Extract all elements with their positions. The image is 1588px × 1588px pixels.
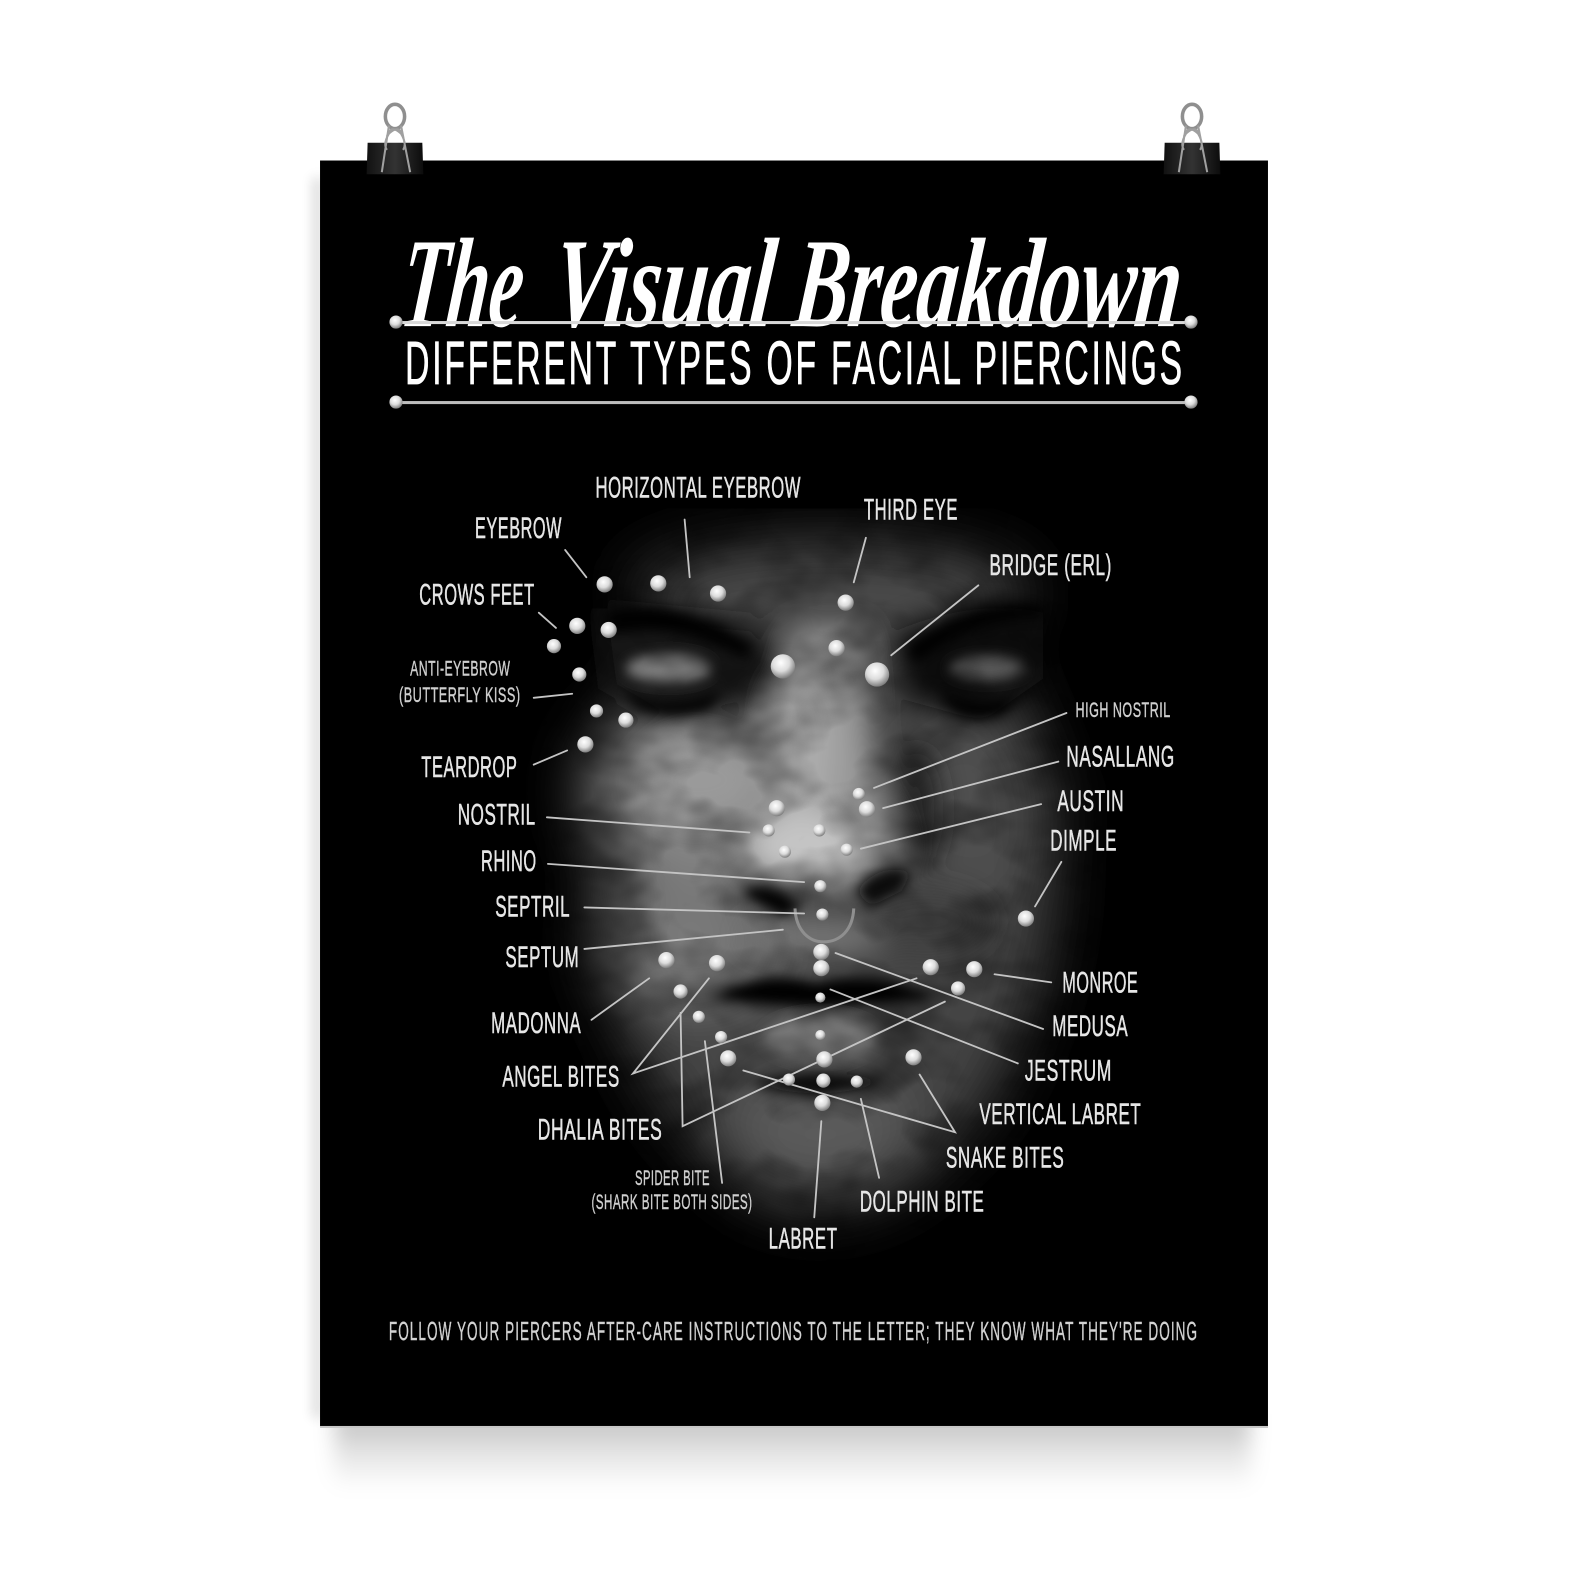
label: bridge (erl) xyxy=(891,549,1112,655)
label: rhino: RHINO xyxy=(481,845,537,878)
label: snake bites: SNAKE BITES xyxy=(946,1142,1064,1175)
title: The Visual Breakdown xyxy=(395,212,1190,354)
label: septril: SEPTRIL xyxy=(495,891,570,924)
label: angel bites: ANGEL BITES xyxy=(502,1061,620,1094)
title rule with end beads xyxy=(389,315,1198,329)
label: dolphin bite xyxy=(860,1099,984,1218)
septum ring xyxy=(795,908,854,942)
label: austin xyxy=(861,785,1124,849)
piercing beads xyxy=(547,575,1034,1111)
label: bridge (erl): BRIDGE (ERL) xyxy=(989,549,1112,582)
title: The Visual Breakdown: The xyxy=(395,212,531,354)
label: dolphin bite: DOLPHIN BITE xyxy=(860,1185,984,1218)
label: high nostril xyxy=(874,698,1171,788)
label: horizontal eyebrow: HORIZONTAL EYEBROW xyxy=(596,471,801,504)
label: nostril xyxy=(458,798,749,832)
label: anti-eyebrow: ANTI-EYEBROW xyxy=(410,657,510,681)
label: dimple xyxy=(1035,825,1117,906)
label: jestrum: JESTRUM xyxy=(1025,1055,1112,1088)
label: medusa: MEDUSA xyxy=(1052,1010,1128,1043)
label: crows feet: CROWS FEET xyxy=(419,579,535,612)
label: high nostril: HIGH NOSTRIL xyxy=(1076,698,1171,722)
label: septum xyxy=(505,930,783,974)
icon: right binder clip xyxy=(1164,104,1220,174)
label: eyebrow xyxy=(475,512,586,577)
label: teardrop: TEARDROP xyxy=(421,751,518,784)
label: angel bites xyxy=(502,978,917,1094)
label: nasallang: NASALLANG xyxy=(1066,741,1175,774)
label: spider bite xyxy=(591,1041,752,1214)
label: septum: SEPTUM xyxy=(505,941,579,974)
label: anti-eyebrow: (BUTTERFLY KISS) xyxy=(399,683,521,707)
label: vertical labret: VERTICAL LABRET xyxy=(979,1098,1141,1131)
face illustration xyxy=(587,542,1053,1205)
label: dimple: DIMPLE xyxy=(1050,825,1117,858)
label: medusa xyxy=(836,953,1128,1043)
title: The Visual Breakdown: Visual xyxy=(547,212,783,354)
title: The Visual Breakdown: Breakdown xyxy=(787,212,1190,354)
subtitle rule with end beads xyxy=(389,395,1198,409)
label: nasallang xyxy=(883,741,1175,808)
label: anti-eyebrow xyxy=(399,657,572,707)
bottom edge highlight xyxy=(320,1426,1268,1428)
icon: left binder clip xyxy=(367,104,423,174)
label: snake bites xyxy=(743,1070,1064,1175)
poster shadow xyxy=(313,177,1251,1489)
label: monroe xyxy=(995,966,1138,1000)
eye sockets xyxy=(598,608,785,724)
label: spider bite: (SHARK BITE BOTH SIDES) xyxy=(591,1190,752,1214)
label: austin: AUSTIN xyxy=(1057,785,1124,818)
label: eyebrow: EYEBROW xyxy=(475,512,562,545)
label: madonna: MADONNA xyxy=(491,1007,581,1040)
label: dhalia bites: DHALIA BITES xyxy=(538,1113,662,1146)
label: labret: LABRET xyxy=(769,1223,838,1256)
label: labret xyxy=(769,1121,838,1256)
label: monroe: MONROE xyxy=(1062,966,1138,999)
label: septril xyxy=(495,891,804,924)
label: dhalia bites xyxy=(538,1002,945,1146)
label: third eye xyxy=(854,494,958,582)
label: horizontal eyebrow xyxy=(596,471,801,577)
label: madonna xyxy=(491,978,649,1040)
label: nostril: NOSTRIL xyxy=(458,798,536,831)
label: spider bite: SPIDER BITE xyxy=(635,1166,710,1190)
label: jestrum xyxy=(830,989,1112,1088)
label: third eye: THIRD EYE xyxy=(864,494,958,527)
label: crows feet xyxy=(419,579,556,628)
label: rhino xyxy=(481,845,804,882)
poster background xyxy=(320,161,1268,1426)
